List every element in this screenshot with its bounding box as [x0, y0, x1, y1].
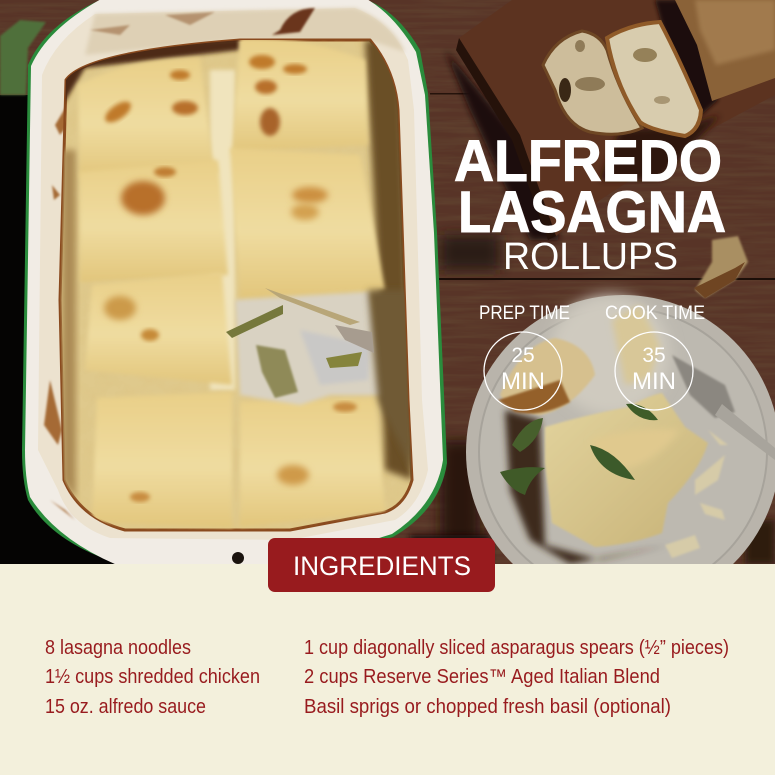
- right rolls: [232, 38, 368, 152]
- shadow under food: [505, 410, 670, 564]
- fork: [672, 355, 775, 460]
- prep time: 25: [511, 344, 535, 367]
- layered cheese and sauce: [65, 117, 232, 530]
- ingredient list: right column: Basil sprigs or chopped fresh basil (optional): [304, 696, 671, 718]
- photo: baked lasagna on wooden table: [0, 0, 775, 609]
- bread loaf: [655, 0, 718, 125]
- sauce base: [60, 40, 412, 530]
- bread slices: [543, 31, 642, 134]
- greens at top left: [0, 20, 46, 95]
- prep time: PREP TIME: [479, 303, 570, 324]
- left rolls: [78, 58, 218, 178]
- baking dish: [22, 0, 447, 572]
- cutting board with bread: [445, 0, 775, 240]
- cook time: MIN: [632, 368, 676, 395]
- plate: [466, 285, 775, 564]
- ingredient list: right column: [304, 637, 729, 718]
- cream ingredients panel: [0, 564, 775, 775]
- wooden table background: [0, 0, 775, 565]
- bread on plate: [500, 338, 595, 415]
- ingredient list: right column: 1 cup diagonally sliced asparagus spears (½” pieces): [304, 637, 729, 659]
- ingredient list: left column: 8 lasagna noodles: [45, 637, 191, 659]
- crumbs: [665, 430, 728, 558]
- title: [454, 129, 726, 278]
- cook time: [605, 303, 705, 410]
- browned spots: [121, 181, 165, 215]
- ingredient list: left column: [45, 637, 260, 718]
- basil leaves: [590, 445, 635, 480]
- lasagna rollups: [60, 30, 420, 540]
- ingredients heading: INGREDIENTS: [293, 551, 471, 581]
- ingredient list: left column: 15 oz. alfredo sauce: [45, 696, 206, 718]
- bread crumb: [694, 236, 748, 298]
- title: ALFREDO: [454, 129, 722, 194]
- lasagna on plate: [545, 393, 708, 547]
- inner wall: [38, 8, 428, 540]
- prep time: MIN: [501, 368, 545, 395]
- cook time: COOK TIME: [605, 303, 705, 324]
- hole in rim: [232, 552, 244, 564]
- title: LASAGNA: [458, 180, 726, 245]
- cook time: 35: [642, 344, 666, 367]
- title: ROLLUPS: [503, 236, 678, 278]
- ingredient list: right column: 2 cups Reserve Series™ Aged Italian Blend: [304, 666, 660, 688]
- prep time: [479, 303, 570, 410]
- ingredients heading: [268, 538, 495, 592]
- baked-on stains: [272, 8, 315, 35]
- gap with sauce, asparagus and chicken: [226, 288, 412, 470]
- ingredient list: left column: 1½ cups shredded chicken: [45, 666, 260, 688]
